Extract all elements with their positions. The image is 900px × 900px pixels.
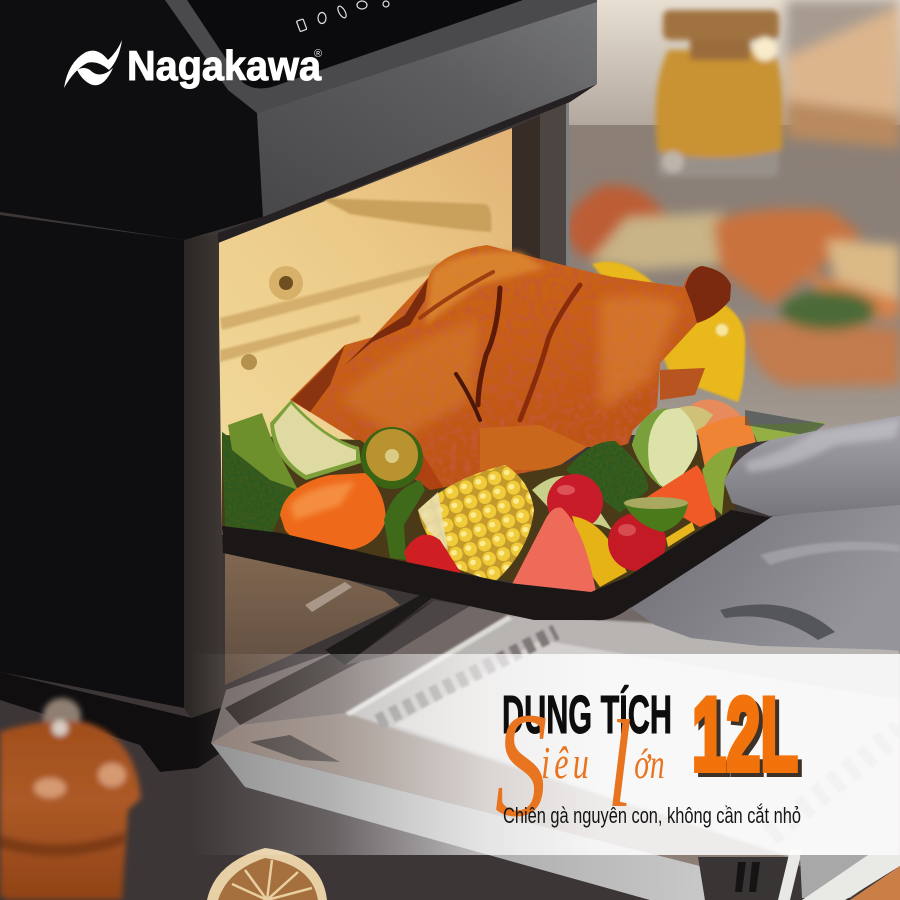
cutting board background [786, 0, 900, 148]
yellow pepper slice [572, 516, 627, 587]
subtitle: Chiên gà nguyên con, không cần cắt nhỏ [503, 803, 801, 828]
script tagline: l [608, 696, 632, 834]
script tagline: S [495, 683, 547, 849]
script tagline: iêu [541, 737, 593, 788]
cherry tomato right [608, 513, 666, 571]
drumstick knob [685, 266, 731, 323]
carrot back [697, 416, 756, 468]
honey jar [656, 10, 783, 177]
script tagline: ớn [634, 741, 665, 787]
left side panel [0, 215, 184, 708]
cherry tomato [547, 474, 603, 530]
capacity number: 12L [696, 681, 802, 797]
caption block [495, 677, 802, 849]
capacity number: 12L [692, 677, 798, 793]
window vents [378, 632, 556, 722]
roast chicken [290, 245, 731, 493]
hinge strip [225, 598, 470, 725]
upper head front [257, 0, 597, 217]
black glass control panel [187, 0, 523, 88]
carrot right wedge [647, 465, 716, 527]
back highlight [425, 251, 545, 325]
control panel bezel [165, 0, 597, 113]
tail and neck flap [345, 278, 428, 365]
registered mark: ® [314, 48, 322, 60]
zucchini far right [750, 422, 825, 442]
open oven door [211, 595, 900, 900]
door corner bottom right [698, 857, 792, 900]
lit interior cavity [218, 128, 570, 535]
translucent text band [190, 654, 900, 855]
yellow bell pepper [592, 262, 745, 402]
window pane [345, 615, 900, 860]
lime small [623, 499, 688, 532]
upper head side [0, 0, 263, 240]
tray far rim [745, 410, 825, 436]
green pepper [384, 480, 425, 560]
zucchini slice [270, 400, 361, 480]
zucchini back centre [532, 476, 612, 530]
cream squash back [673, 406, 713, 432]
right-hand vents [770, 730, 900, 835]
baking tray [222, 510, 773, 620]
capacity number [692, 677, 802, 797]
door top plate [211, 603, 900, 866]
broccoli left [222, 432, 298, 533]
upper glove [724, 416, 900, 516]
lime half [361, 427, 423, 489]
dark gasket [325, 595, 432, 665]
watermelon-red wedge [509, 508, 596, 593]
yellow under [666, 522, 695, 547]
filler under vegetables [222, 435, 735, 595]
broccoli right [566, 441, 648, 513]
pepper back [702, 446, 738, 515]
right door pillar [512, 116, 540, 280]
oven gloves [631, 416, 900, 650]
zucchini right round [632, 408, 697, 488]
counter surface bottom [0, 690, 720, 900]
vegetables [222, 399, 825, 595]
back leg cream [660, 368, 705, 400]
silver front edge [211, 743, 705, 900]
zucchini wedge back [228, 413, 298, 490]
headline dung tich: DUNG TÍCH [502, 685, 672, 745]
carrot left [280, 473, 386, 550]
wing crease shadows [420, 272, 580, 420]
dried orange slice [207, 848, 327, 900]
brand logo [64, 40, 322, 89]
lower wing [480, 425, 587, 470]
logo mark [64, 40, 122, 88]
blurred plate of food [566, 185, 900, 386]
corn cob [418, 465, 534, 582]
front left pillar [184, 234, 225, 720]
pepper grinder [0, 698, 141, 900]
lower glove [631, 503, 900, 650]
frame metal [211, 713, 800, 866]
air fryer oven body [0, 0, 597, 772]
base foot [0, 672, 225, 772]
logo wordmark: Nagakawa [127, 42, 322, 89]
cavity floor [225, 540, 400, 685]
tomato lower left [404, 535, 461, 573]
pink carrot back [691, 399, 741, 428]
wood counter corner [850, 866, 900, 900]
touch icons [296, 1, 389, 32]
